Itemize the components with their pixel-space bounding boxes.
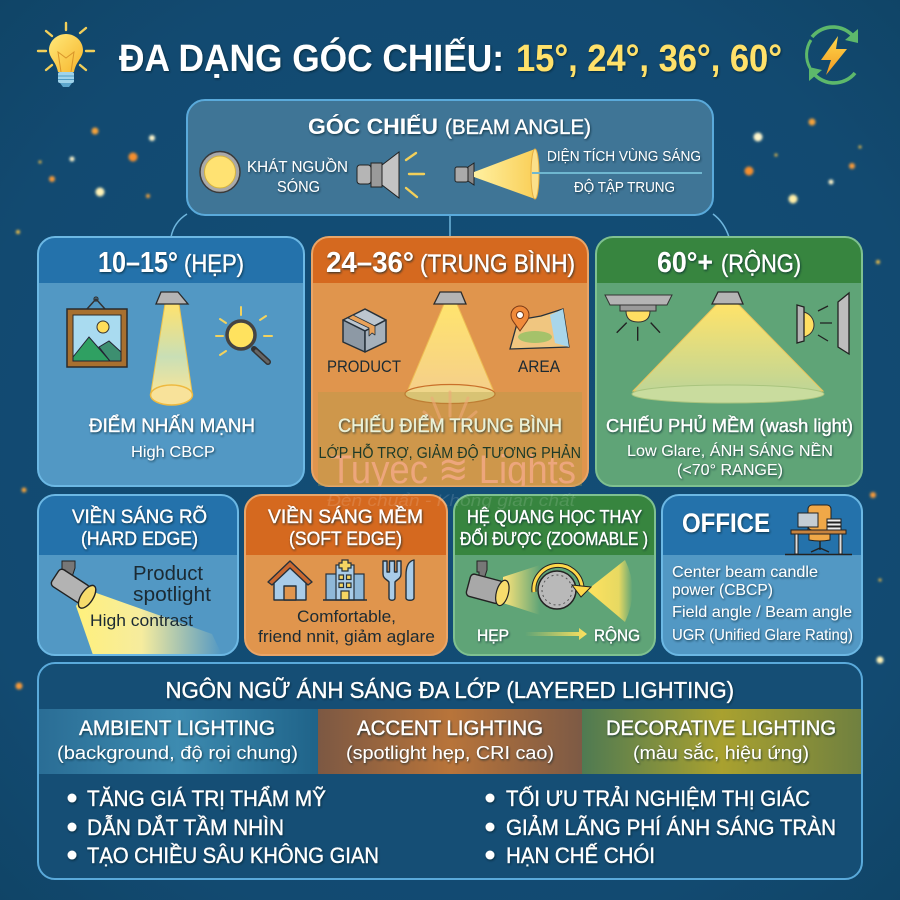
text: office metrics: Center beam candle (672, 564, 818, 581)
list: benefits right (486, 785, 836, 868)
heading: zoomable: ĐỔI ĐƯỢC (ZOOMABLE ) (460, 528, 648, 549)
heading: wide (657, 247, 801, 279)
icon: hospital (323, 560, 367, 600)
text: office metrics: UGR (Unified Glare Rating) (672, 627, 853, 644)
heading: beam angle (308, 114, 591, 139)
text: wash light (606, 415, 853, 479)
heading: medium: 24–36° (326, 247, 414, 279)
icon: wide beam (587, 560, 632, 622)
text: narrow to wide: HẸP (477, 626, 509, 645)
icon: fork and knife (383, 560, 414, 600)
panel: layered lighting (38, 663, 862, 879)
heading: wide: 60°+ (657, 247, 713, 279)
text: product spotlight (90, 563, 211, 630)
text: ambient: AMBIENT LIGHTING (79, 717, 275, 740)
panel: soft edge (245, 495, 447, 655)
icon: magnifier (216, 307, 272, 362)
text: source: KHÁT NGUỒN (247, 157, 348, 176)
heading: medium: (TRUNG BÌNH) (420, 249, 575, 278)
text: area and focus (547, 148, 701, 196)
heading: soft edge: VIỀN SÁNG MỀM (268, 505, 423, 528)
list: benefits right: GIẢM LÃNG PHÍ ÁNH SÁNG TRÀN (506, 815, 836, 840)
panel: wide 60+ (596, 237, 862, 487)
list: benefits left: TẠO CHIỀU SÂU KHÔNG GIAN (87, 843, 379, 868)
heading: narrow: 10–15° (98, 247, 178, 279)
band: lighting layers (38, 709, 862, 774)
text: comfortable (258, 608, 435, 646)
list: benefits right: HẠN CHẾ CHÓI (506, 843, 655, 868)
panel: medium 24-36 (312, 237, 588, 492)
panel: zoomable (454, 495, 655, 655)
panel: office (662, 495, 862, 655)
icon: ceiling light (605, 295, 672, 341)
text: comfortable: Comfortable, (297, 608, 396, 626)
text: area and focus: ĐỘ TẬP TRUNG (574, 179, 675, 196)
panel: narrow 10-15 (38, 237, 304, 487)
title (119, 36, 782, 80)
heading: narrow: (HẸP) (184, 250, 244, 278)
icon: narrow beam (503, 565, 540, 615)
list: benefits right: TỐI ƯU TRẢI NGHIỆM THỊ GIÁC (506, 785, 810, 811)
icon: medium downlight (405, 292, 495, 404)
heading: medium (326, 247, 575, 279)
watermark: brand (330, 392, 576, 492)
heading: hard edge: (HARD EDGE) (81, 528, 198, 550)
text: strong accent (89, 415, 255, 461)
text: area and focus: DIỆN TÍCH VÙNG SÁNG (547, 148, 701, 165)
label: product: PRODUCT (327, 357, 401, 376)
text: ambient: (background, độ rọi chung) (57, 743, 298, 763)
text: office metrics: power (CBCP) (672, 582, 773, 599)
icon: spotlight (48, 561, 99, 611)
list: benefits left: DẪN DẮT TẦM NHÌN (87, 814, 284, 840)
list: benefits left (68, 786, 379, 868)
heading: beam angle: GÓC CHIẾU (308, 114, 438, 139)
watermark: slogan: Đèn chuẩn - Không gian chất (327, 491, 576, 510)
text: wash light: Low Glare, ÁNH SÁNG NỀN (627, 441, 833, 460)
icon: framed picture (67, 297, 127, 367)
text: accent: (spotlight hẹp, CRI cao) (346, 743, 554, 763)
heading: zoomable: HỆ QUANG HỌC THAY (467, 507, 642, 527)
title: ĐA DẠNG GÓC CHIẾU: (119, 36, 504, 80)
icon: light source disc (200, 152, 240, 192)
text: wash light: CHIẾU PHỦ MỀM (wash light) (606, 415, 853, 436)
watermark: brand: Tuyec ≋ Lights (330, 448, 576, 492)
heading: beam angle: (BEAM ANGLE) (445, 116, 591, 139)
text: narrow to wide (477, 626, 640, 645)
text: product spotlight: Product (133, 563, 203, 585)
text: wash light: (<70° RANGE) (677, 462, 783, 479)
text: product spotlight: spotlight (133, 584, 211, 606)
heading: narrow (98, 247, 244, 279)
heading: office: OFFICE (682, 508, 770, 538)
list: benefits left: TĂNG GIÁ TRỊ THẨM MỸ (87, 786, 326, 811)
panel: beam angle definition (187, 100, 713, 215)
text: accent (346, 717, 554, 763)
text: accent: ACCENT LIGHTING (357, 717, 543, 740)
text: medium spot: LỚP HỖ TRỢ, GIẢM ĐỘ TƯƠNG PHẢN (318, 444, 581, 462)
text: comfortable: friend nnit, giảm aglare (258, 628, 435, 646)
heading: layered lighting: NGÔN NGỮ ÁNH SÁNG ĐA LỚP (LAYERED LIGHTING) (166, 676, 734, 703)
text: ambient (57, 717, 298, 763)
icon: house (268, 561, 312, 600)
text: decorative (606, 717, 836, 763)
icon: wide lamp with rays (357, 152, 424, 198)
icon: area map (510, 306, 569, 349)
icon: zoom spotlight (465, 561, 512, 607)
icon: office desk (785, 505, 852, 554)
heading: soft edge: (SOFT EDGE) (289, 528, 402, 550)
text: product spotlight: High contrast (90, 611, 193, 630)
text: narrow to wide: RỘNG (594, 626, 640, 645)
text: office metrics: Field angle / Beam angle (672, 604, 852, 621)
icon: light bulb (38, 23, 94, 87)
icon: hard beam (76, 590, 222, 655)
text: strong accent: ĐIỂM NHẤN MẠNH (89, 415, 255, 437)
heading: soft edge (268, 505, 423, 550)
icon: narrow lamp with cone (455, 149, 539, 199)
icon: wide downlight (632, 292, 824, 403)
heading: hard edge: VIỀN SÁNG RÕ (72, 504, 207, 528)
text: medium spot: CHIẾU ĐIỂM TRUNG BÌNH (338, 415, 562, 437)
text: decorative: DECORATIVE LIGHTING (606, 717, 836, 740)
text: source (247, 157, 348, 196)
icon: narrow downlight (150, 292, 192, 405)
text: source: SÓNG (277, 177, 320, 196)
text: decorative: (màu sắc, hiệu ứng) (633, 742, 809, 763)
icon: wall washer (797, 293, 849, 354)
title: 15°, 24°, 36°, 60° (516, 38, 782, 80)
heading: zoomable (460, 507, 648, 549)
panel: hard edge (38, 495, 238, 655)
icon: energy cycle bolt (807, 27, 858, 83)
icon: product box (343, 309, 386, 352)
icon: dial with arrow (534, 565, 591, 609)
text: strong accent: High CBCP (131, 444, 215, 461)
label: area: AREA (518, 357, 561, 376)
heading: wide: (RỘNG) (721, 249, 801, 278)
text: office metrics (672, 564, 853, 644)
heading: hard edge (72, 504, 207, 550)
text: medium spot (318, 415, 581, 462)
